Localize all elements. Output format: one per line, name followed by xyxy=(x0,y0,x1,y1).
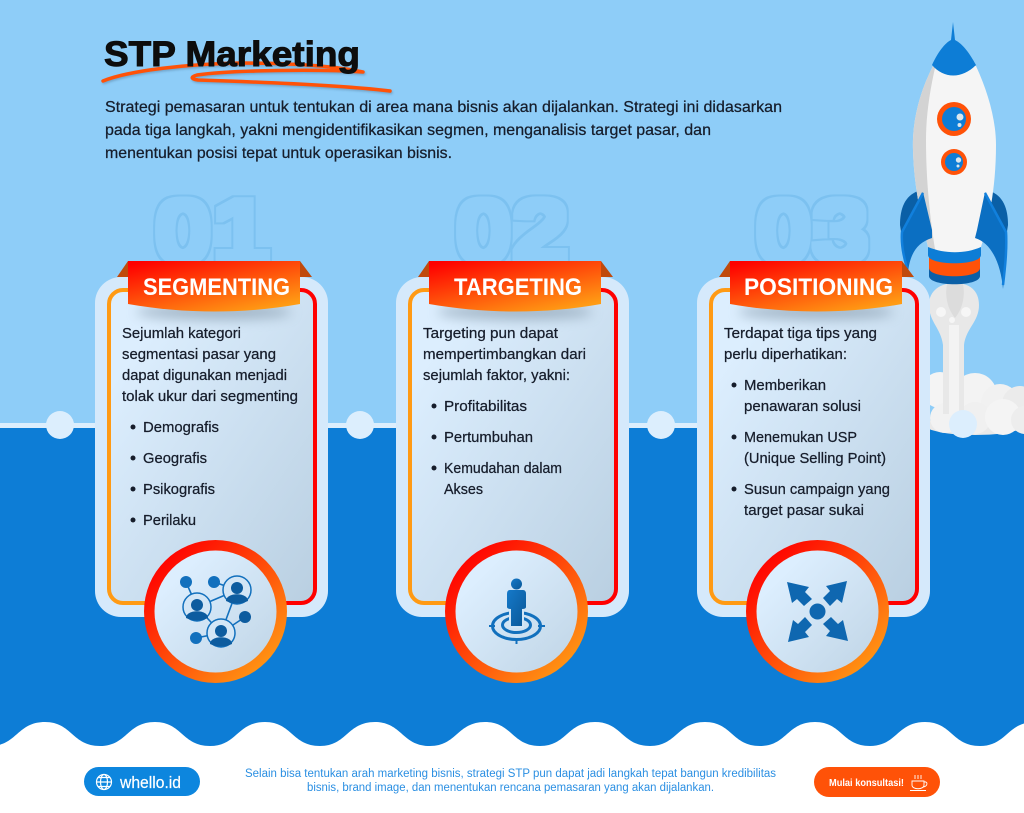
description xyxy=(423,325,586,384)
panel: segmenting xyxy=(95,181,328,683)
description: tolak ukur dari segmenting xyxy=(122,388,298,405)
front fins xyxy=(901,192,1007,289)
bullet list: Geografis xyxy=(143,450,207,467)
footer brand pill xyxy=(84,767,200,796)
card background xyxy=(95,277,328,617)
description: sejumlah faktor, yakni: xyxy=(423,367,570,384)
sky background xyxy=(0,0,1024,426)
bullet list xyxy=(432,398,562,498)
ribbon xyxy=(418,261,613,320)
number 01: 01 xyxy=(154,181,270,280)
footer brand pill: whello.id xyxy=(119,773,181,792)
ribbon: POSITIONING xyxy=(744,274,893,301)
icon badge: arrows xyxy=(746,540,889,683)
description: Terdapat tiga tips yang xyxy=(724,325,877,342)
smoke clouds xyxy=(922,372,1024,435)
card inner panel xyxy=(711,290,917,603)
description: segmentasi pasar yang xyxy=(122,346,276,363)
description: dapat digunakan menjadi xyxy=(122,367,287,384)
ribbon: SEGMENTING xyxy=(143,274,290,301)
bullet list: Akses xyxy=(444,481,483,498)
timeline line xyxy=(0,423,962,428)
icon badge: target person xyxy=(445,540,588,683)
bullet list: Menemukan USP xyxy=(744,429,857,446)
panel: targeting xyxy=(396,181,629,683)
exhaust plume xyxy=(929,283,979,415)
description: Targeting pun dapat xyxy=(423,325,559,342)
number 03: 03 xyxy=(755,181,869,280)
footer note xyxy=(245,768,776,794)
bullet list: target pasar sukai xyxy=(744,502,864,519)
ribbon xyxy=(719,261,914,320)
icon badge: network xyxy=(144,540,287,683)
blue lower background xyxy=(0,425,1024,750)
intro paragraph: pada tiga langkah, yakni mengidentifikasikan segmen, menganalisis target pasar, dan xyxy=(105,122,711,139)
card background xyxy=(396,277,629,617)
bullet list: Pertumbuhan xyxy=(444,429,533,446)
ribbon xyxy=(117,261,312,320)
bullet list: (Unique Selling Point) xyxy=(744,450,886,467)
bullet list xyxy=(130,419,219,529)
consult button xyxy=(814,767,940,797)
description: Sejumlah kategori xyxy=(122,325,241,342)
porthole large xyxy=(937,102,971,136)
engine collar xyxy=(928,247,981,284)
panel: positioning xyxy=(697,181,930,683)
bullet list: Profitabilitas xyxy=(444,398,527,415)
bullet list: Perilaku xyxy=(143,512,196,529)
footer note: bisnis, brand image, dan menentukan rencana pemasaran yang akan dijalankan. xyxy=(307,782,714,794)
intro paragraph xyxy=(105,99,782,162)
description xyxy=(724,325,877,363)
bullet list: Susun campaign yang xyxy=(744,481,890,498)
icon: globe xyxy=(96,774,112,790)
description xyxy=(122,325,298,405)
card inner panel xyxy=(410,290,616,603)
timeline node 3 xyxy=(647,411,675,439)
nose cone xyxy=(932,22,976,76)
timeline node 1 xyxy=(46,411,74,439)
bullet list: Psikografis xyxy=(143,481,215,498)
title: STP Marketing xyxy=(104,35,360,74)
fin highlights xyxy=(902,193,1006,285)
description: perlu diperhatikan: xyxy=(724,346,847,363)
timeline node 4 xyxy=(949,410,977,438)
bullet list xyxy=(732,377,890,519)
rocket body xyxy=(913,66,996,258)
card background xyxy=(697,277,930,617)
bullet list: Demografis xyxy=(143,419,219,436)
rear fins xyxy=(900,191,1008,238)
bullet list: Memberikan xyxy=(744,377,826,394)
description: mempertimbangkan dari xyxy=(423,346,586,363)
body shadow xyxy=(913,66,936,255)
card inner panel xyxy=(109,290,315,603)
number 02: 02 xyxy=(455,181,569,280)
intro paragraph: Strategi pemasaran untuk tentukan di area mana bisnis akan dijalankan. Strategi ini didasarkan xyxy=(105,99,782,116)
porthole small xyxy=(941,149,967,175)
bullet list: penawaran solusi xyxy=(744,398,861,415)
intro paragraph: menentukan posisi tepat untuk operasikan bisnis. xyxy=(105,145,452,162)
rocket illustration xyxy=(900,22,1024,435)
footer note: Selain bisa tentukan arah marketing bisnis, strategi STP pun dapat jadi langkah tepat bangun kredibilitas xyxy=(245,768,776,780)
timeline node 2 xyxy=(346,411,374,439)
consult button: Mulai konsultasi! xyxy=(829,778,904,789)
title swoosh xyxy=(103,63,391,92)
ribbon: TARGETING xyxy=(454,274,582,301)
bullet list: Kemudahan dalam xyxy=(444,460,562,477)
icon: coffee cup xyxy=(910,775,927,790)
white footer wave xyxy=(0,722,1024,813)
